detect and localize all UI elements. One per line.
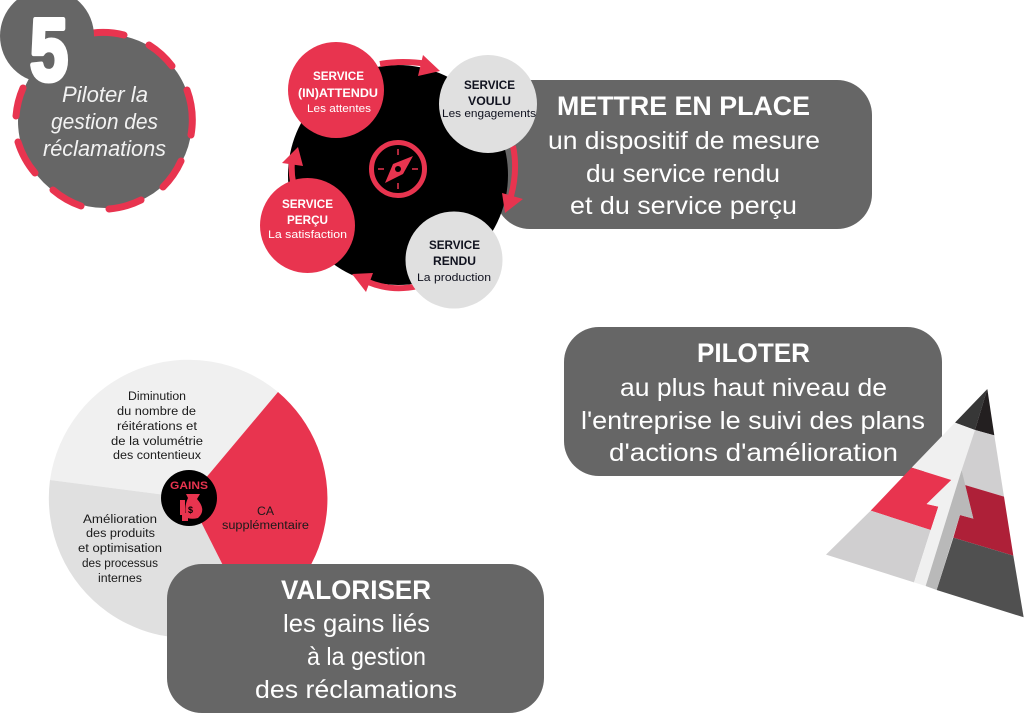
pie labels: Amélioration bbox=[83, 514, 157, 526]
icon: money bag: $ bbox=[188, 505, 193, 515]
badge title: gestion des bbox=[51, 109, 158, 134]
box text: et du service perçu bbox=[570, 192, 797, 220]
box text: d'actions d'amélioration bbox=[609, 439, 898, 467]
node: service perçu: La satisfaction bbox=[268, 229, 347, 241]
badge title: Piloter la bbox=[62, 82, 148, 107]
pie labels: et optimisation bbox=[78, 543, 162, 555]
panel: valoriser box bbox=[167, 564, 544, 713]
pie labels: des processus bbox=[82, 558, 158, 570]
node: service voulu bbox=[439, 55, 537, 153]
node: service rendu bbox=[406, 212, 502, 308]
badge title: réclamations bbox=[43, 136, 166, 161]
node: service perçu bbox=[260, 178, 355, 273]
pie labels: CA bbox=[257, 506, 274, 518]
chart: gains pie bbox=[49, 360, 327, 638]
pie labels bbox=[78, 391, 309, 585]
icon: compass bbox=[372, 142, 424, 196]
box text bbox=[548, 91, 820, 220]
box background bbox=[564, 327, 942, 476]
node: service inattendu bbox=[288, 42, 384, 138]
pie slice: CA bbox=[189, 392, 327, 623]
node: service inattendu: SERVICE bbox=[313, 69, 364, 83]
panel: step 5 badge bbox=[0, 0, 192, 209]
box text: PILOTER bbox=[697, 338, 810, 368]
cycle arrows bbox=[282, 55, 523, 292]
pie labels: réitérations et bbox=[117, 421, 198, 433]
pie labels: des produits bbox=[86, 528, 155, 540]
pie labels: Diminution bbox=[128, 391, 186, 403]
node: service perçu: PERÇU bbox=[287, 213, 328, 227]
node: service rendu: RENDU bbox=[433, 254, 476, 268]
node: service rendu: La production bbox=[417, 272, 491, 284]
box text: à la gestion bbox=[307, 643, 426, 671]
box text: METTRE EN PLACE bbox=[557, 91, 810, 121]
cycle black disc bbox=[288, 65, 508, 285]
box text: du service rendu bbox=[586, 160, 780, 188]
box text: l'entreprise le suivi des plans bbox=[581, 407, 925, 435]
pie labels: internes bbox=[98, 573, 142, 585]
box text bbox=[581, 338, 925, 467]
node: service voulu: Les engagements bbox=[442, 108, 537, 120]
pie labels: supplémentaire bbox=[222, 520, 309, 532]
pie labels: des contentieux bbox=[113, 450, 201, 462]
box text: des réclamations bbox=[255, 676, 457, 704]
badge dashed ring bbox=[16, 32, 192, 209]
chart: pyramid bbox=[826, 389, 1024, 617]
pie labels: de la volumétrie bbox=[111, 436, 203, 448]
box text: VALORISER bbox=[281, 575, 431, 605]
box background bbox=[495, 80, 872, 229]
node: service rendu: SERVICE bbox=[429, 238, 480, 252]
node: service inattendu: (IN)ATTENDU bbox=[298, 86, 378, 100]
pie centre: gains bbox=[161, 470, 217, 526]
node: service inattendu: Les attentes bbox=[307, 103, 372, 115]
pie centre: gains: GAINS bbox=[170, 480, 208, 492]
box text bbox=[255, 575, 457, 704]
badge title bbox=[43, 82, 166, 161]
panel: piloter box bbox=[564, 327, 942, 476]
badge number: 5 bbox=[30, 0, 68, 99]
panel: mettre en place box bbox=[495, 80, 872, 229]
box text: les gains liés bbox=[283, 610, 430, 638]
node: service voulu: VOULU bbox=[468, 94, 511, 108]
badge main circle bbox=[18, 34, 192, 208]
pie slice: diminution bbox=[50, 360, 278, 498]
box text: un dispositif de mesure bbox=[548, 127, 820, 155]
node: service voulu: SERVICE bbox=[464, 78, 515, 92]
node: service perçu: SERVICE bbox=[282, 197, 333, 211]
badge number circle bbox=[0, 0, 94, 83]
box text: au plus haut niveau de bbox=[620, 374, 887, 402]
pie slice: amelioration bbox=[49, 480, 252, 638]
pie labels: du nombre de bbox=[117, 406, 196, 418]
chart: service cycle bbox=[260, 42, 537, 308]
box background bbox=[167, 564, 544, 713]
